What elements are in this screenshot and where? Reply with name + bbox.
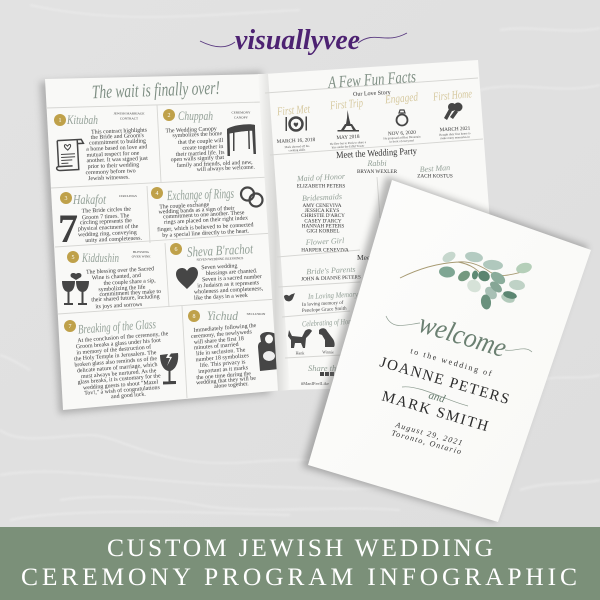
text: location: Toronto, Ontario (390, 428, 462, 456)
cell 7: breaking of the glass: glass breaks, it is customary for the (77, 372, 161, 386)
cell 5: kiddushin: OVER WINE (132, 254, 150, 258)
cell 1: ketubah: This contract highlights (91, 128, 148, 136)
cell 6: sheva b'rachot: Sheva B'rachot (187, 242, 254, 261)
wedding party names (296, 159, 453, 254)
wedding party names: GIGI KORBEL (306, 228, 340, 234)
timeline: first home: make many memories in (440, 135, 470, 140)
heading: welcome script: welcome (415, 308, 510, 364)
wedding party names: ELIZABETH PETERS (297, 184, 345, 190)
timeline: engaged: in front of everyone! (389, 138, 414, 144)
timeline: first home: Bought their first home to (439, 131, 471, 137)
wedding party names: Bridesmaids (302, 192, 342, 203)
wedding party names: HANNAH PETERS (302, 224, 344, 230)
cell 1: ketubah: mutual respect for one (86, 150, 140, 159)
cell 7: breaking of the glass (64, 316, 178, 403)
wedding party names: Maid of Honor (296, 172, 346, 183)
section: share hashtag (301, 364, 340, 386)
cell 6: sheva b'rachot (170, 242, 264, 302)
cell 2: chuppah: will always be welcome. (197, 165, 256, 173)
section: parents: Bride's Parents (306, 265, 356, 276)
cell 8: yichud: wedding that they will be (196, 376, 257, 386)
cell 4: exchange of rings: wedding bands as a sign of their (158, 205, 235, 216)
cell 5: kiddushin: BLESSING (133, 250, 150, 254)
cell 1: ketubah: ceremony before two (85, 167, 136, 176)
shadow of open program (40, 71, 270, 414)
cell 2: chuppah: open walls signify that (170, 154, 225, 163)
icon: dog winnie (319, 328, 335, 347)
cell 4: exchange of rings: by a special line directly to the heart. (162, 228, 250, 239)
cell 4: exchange of rings: The couple exchange (159, 202, 210, 211)
cell 8: yichud: alone together. (214, 381, 249, 390)
banner: title band: CUSTOM JEWISH WEDDING (107, 533, 493, 562)
timeline: first trip (329, 96, 367, 149)
section: in loving memory: Penelope Grace Smith (302, 307, 347, 314)
cell 7: breaking of the glass: Tov!," a wish of congratulations (84, 384, 161, 397)
icon: dog hank (288, 329, 312, 348)
cell 5: kiddushin: symbolizing the life (98, 284, 146, 293)
cell 2: chuppah: 2 (168, 113, 170, 119)
cell 8: yichud: number 18 symbolizes (195, 353, 250, 363)
icon: eucalyptus sprig (400, 250, 533, 310)
cell 7: breaking of the glass: Groom breaks a glass under his foot (76, 337, 161, 350)
cell 4: exchange of rings: rings are placed on their right index (164, 215, 248, 226)
cell 4: exchange of rings: Exchange of Rings (166, 187, 235, 204)
cell 5: kiddushin: their shared future, including (91, 293, 160, 304)
cell 4: exchange of rings (151, 187, 262, 239)
cell 5: kiddushin (62, 250, 162, 311)
cell 8: yichud: Yichud (207, 308, 238, 323)
cell 1: ketubah: 1 (58, 118, 62, 124)
timeline: first met (276, 102, 316, 152)
cell 8: yichud: Immediately following the (193, 322, 257, 334)
cell 7: breaking of the glass: 7 (68, 324, 72, 330)
timeline: first trip: First Trip (329, 96, 363, 112)
section: in loving memory: In Loving Memory (307, 290, 359, 301)
icon: door hanger (258, 332, 279, 371)
wedding party names: JESSICA KEYS (305, 208, 339, 214)
section: in loving memory (284, 290, 359, 314)
timeline: first met: MARCH 16, 2018 (277, 137, 316, 145)
cell 4: exchange of rings: finger, which is believed to be connected (157, 221, 254, 233)
wedding party names: ZACH KOSTUS (417, 174, 453, 180)
icon: canopy (227, 124, 256, 156)
cell 1: ketubah: Kitubah (66, 112, 98, 127)
logo: visuallyvee: visuallyvee (235, 24, 360, 56)
heading: meet the wedding party: Meet the Wedding Party (336, 147, 417, 161)
centre fold (258, 74, 290, 391)
wedding party names: Rabbi (366, 159, 387, 168)
cell 1: ketubah: another. It was signed just (86, 156, 148, 164)
cell 8: yichud: will share the first 18 (194, 335, 244, 346)
timeline: first trip: MAY 2018 (336, 134, 360, 141)
timeline: engaged: He proposed at Blue Mountain (383, 135, 421, 140)
heading: the wait is finally over: The wait is finally over! (92, 78, 220, 103)
text: and divider: and (427, 389, 447, 406)
text: joanne peters: JOANNE PETERS (378, 354, 511, 408)
icon: broken glass (160, 353, 178, 384)
section: pets: Celebrating of Honor (302, 317, 358, 328)
cell 2: chuppah: family and friends, old and new, (176, 159, 253, 169)
cell 5: kiddushin: 5 (72, 255, 74, 261)
shadow of cover (302, 176, 588, 522)
logo: visuallyvee (200, 24, 407, 56)
cell 8: yichud: ceremony, the newlyweds (191, 329, 253, 340)
cell 3: hakafot (58, 192, 143, 251)
cell 8: yichud: life. This privacy is (200, 358, 246, 369)
icon: wine glasses with heart (62, 273, 89, 305)
cell 7: breaking of the glass: the Holy Temple in Jerusalem. The (74, 350, 157, 363)
cell 6: sheva b'rachot: Seven is a sacred number (202, 274, 262, 283)
panel: program cover (308, 180, 591, 522)
timeline: first home: First Home (432, 86, 473, 104)
cell 1: ketubah (54, 112, 150, 182)
cell 3: hakafot: Groom 7 times. The (82, 213, 130, 221)
cell 5: kiddushin: The blessing over the Sacred (86, 266, 154, 276)
timeline: first met: cooking skills (288, 148, 306, 152)
cell 3: hakafot: 3 (64, 196, 68, 202)
cell 6: sheva b'rachot: blessings are chanted. (206, 268, 258, 277)
section: share hashtag: Share the (308, 364, 340, 373)
cell 8: yichud: minutes of married (194, 341, 239, 351)
wedding party names: AMY CENEVIVA (302, 203, 342, 209)
cell 7: breaking of the glass: broken glass also reminds us of the (74, 355, 158, 369)
wedding party names: BRYAN WEXLER (357, 169, 398, 175)
cell 2: chuppah: CEREMONY (231, 110, 251, 114)
cell 7: breaking of the glass: delicate nature of marriage, which (77, 361, 158, 374)
timeline: first met: Mark showed off his (284, 144, 310, 149)
section: in loving memory: In loving memory of (302, 301, 344, 308)
cell 3: hakafot: CIRCLINGS (119, 194, 137, 198)
section: pets: Winnie (322, 350, 334, 354)
cell 6: sheva b'rachot: SEVEN WEDDING BLESSINGS (196, 256, 244, 262)
cell 2: chuppah: that the couple will (178, 138, 224, 146)
cell 3: hakafot: Hakafot (72, 193, 107, 208)
heading: welcome script (386, 308, 532, 364)
wedding party names: Best Man (419, 163, 450, 174)
subheading: our love story: Our Love Story (353, 90, 391, 98)
icon: wedding rings (241, 188, 262, 206)
section: parents (301, 253, 373, 283)
cell 1: ketubah: the Bride and Groom's (91, 133, 145, 141)
cell 6: sheva b'rachot: Seven wedding (201, 263, 238, 271)
cell 2: chuppah (163, 108, 256, 174)
section: parents: Meet (357, 253, 373, 262)
cell 1: ketubah: prior to their wedding (88, 162, 139, 170)
timeline: first trip: He flew her to Paris to share a (330, 140, 367, 146)
cell 1: ketubah: Jewish witnesses. (88, 175, 130, 182)
cell 6: sheva b'rachot: 6 (174, 247, 178, 253)
wedding party names: HARPER CENEVIVA (301, 248, 349, 254)
cell 3: hakafot: unity and completeness. (85, 236, 143, 244)
timeline: engaged (383, 89, 421, 144)
cell 5: kiddushin: Kiddushin (81, 250, 119, 265)
section: share hashtag: #ManIFeelLike (301, 381, 329, 386)
cell 7: breaking of the glass: and good luck. (111, 392, 147, 400)
cell 3: hakafot: wedding ring, conveying (78, 230, 137, 238)
text: to the wedding of: to the wedding of (409, 346, 493, 378)
cell 2: chuppah: CANOPY (234, 116, 249, 120)
icon: ketubah scroll (55, 139, 85, 171)
cell 7: breaking of the glass: At the conclusion of the ceremony, the (77, 330, 169, 344)
timeline: engaged: Engaged (384, 89, 419, 106)
cell 8: yichud: life in seclusion. The (196, 346, 246, 357)
cell 5: kiddushin: Wine is chanted, and (92, 273, 141, 281)
icon: heart (176, 267, 198, 289)
timeline: engaged: NOV 6, 2020 (388, 130, 417, 137)
cell 8: yichud (188, 308, 279, 391)
cell 2: chuppah: The Wedding Canopy (165, 126, 217, 134)
wedding party names: CASEY D'ARCY (304, 218, 342, 224)
wedding party names: Flower Girl (305, 236, 345, 247)
cell 5: kiddushin: commitment they make to (99, 289, 161, 298)
cell 8: yichud: SECLUSION (247, 312, 266, 316)
timeline: first trip: kiss under the Eiffel Tower (332, 144, 364, 149)
cell 5: kiddushin: the couple share a sip, (103, 278, 156, 287)
section: parents: JOHN & DIANNE PETERS (301, 274, 361, 283)
cell 1: ketubah: JEWISH MARRIAGE (114, 112, 144, 116)
cell 3: hakafot: physical enactment of the (78, 223, 139, 232)
cell 2: chuppah: create together in (182, 144, 224, 152)
cell 6: sheva b'rachot: like the days in a week (194, 293, 248, 302)
timeline: first met: First Met (276, 102, 311, 118)
icon: number seven: 7 (58, 206, 78, 251)
cell 3: hakafot: circling represents the (80, 218, 132, 226)
banner: title band (0, 527, 600, 600)
section: pets (288, 317, 358, 356)
cell 6: sheva b'rachot: wholeness and completeness, (194, 286, 264, 296)
cell 4: exchange of rings: commitment to one another. These (163, 210, 245, 220)
cell 8: yichud: 8 (192, 314, 196, 320)
cell 2: chuppah: Chuppah (178, 108, 213, 123)
text: and divider (402, 387, 468, 406)
section: pets: Hank (296, 350, 304, 356)
timeline: first home: MARCH 2021 (439, 126, 471, 133)
heading: a few fun facts: A Few Fun Facts (327, 67, 417, 92)
text: date: August 29, 2021 (394, 420, 463, 447)
text: mark smith: MARK SMITH (380, 388, 490, 435)
banner: title band: CEREMONY PROGRAM INFOGRAPHIC (21, 562, 577, 591)
cell 1: ketubah: commitment to building (89, 138, 146, 147)
cell 4: exchange of rings: 4 (156, 191, 158, 197)
cell 5: kiddushin: its joys and sorrows (95, 302, 143, 310)
cell 7: breaking of the glass: must always be nurtured. As the (81, 368, 157, 380)
cell 2: chuppah: their married life. Its (176, 149, 225, 158)
cell 6: sheva b'rachot: in Judaism as it represents (197, 280, 260, 289)
timeline: first home (432, 86, 473, 140)
cell 2: chuppah: symbolizes the home (172, 131, 223, 139)
cell 8: yichud: important as it marks (198, 365, 249, 375)
wedding party names: CHRISTIE D'ARCY (301, 213, 345, 219)
cell 7: breaking of the glass: wedding guests to shout "Mazel (83, 380, 159, 391)
cell 1: ketubah: CONTRACT (120, 116, 139, 120)
panel: open program right page (258, 60, 502, 391)
cell 3: hakafot: The Bride circles the (82, 207, 131, 215)
cell 7: breaking of the glass: Breaking of the Glass (77, 316, 156, 337)
cell 1: ketubah: a home based on love and (86, 144, 147, 153)
cell 7: breaking of the glass: in memory of the destruction of (76, 344, 151, 356)
cell 8: yichud: the one time during the (196, 371, 252, 381)
